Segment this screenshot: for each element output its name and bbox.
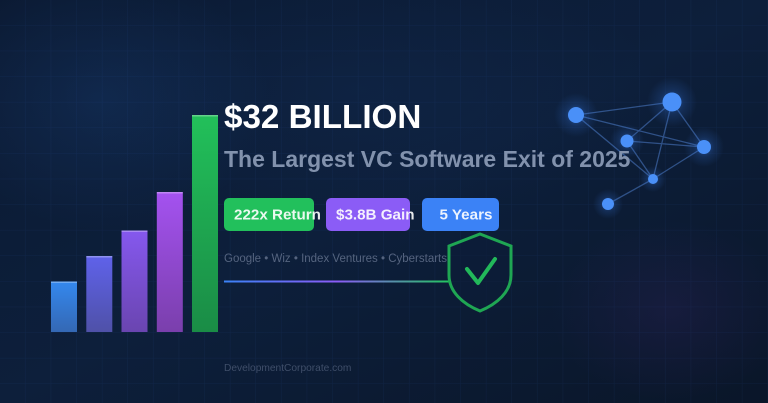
network diagram [554,77,724,219]
bar 2 [86,256,112,332]
subtitle: The Largest VC Software Exit of 2025 [224,146,631,172]
icon: shield with check [449,234,511,311]
badge: return [224,198,321,231]
bar chart: growth [51,115,218,332]
badge: years [422,198,499,231]
title: $32 BILLION [224,99,421,136]
bar 4 [157,192,183,332]
footer: DevelopmentCorporate.com [224,363,351,374]
badge: gain: $3.8B Gain [336,206,415,224]
companies text: Google • Wiz • Index Ventures • Cyberstarts [224,253,447,265]
gradient rule [224,280,450,282]
bar 1 [51,282,77,332]
badge: gain [326,198,415,231]
badge: return: 222x Return [234,206,321,224]
bar 3 [122,230,148,332]
bar 5 [192,115,218,332]
badge: years: 5 Years [440,206,492,224]
